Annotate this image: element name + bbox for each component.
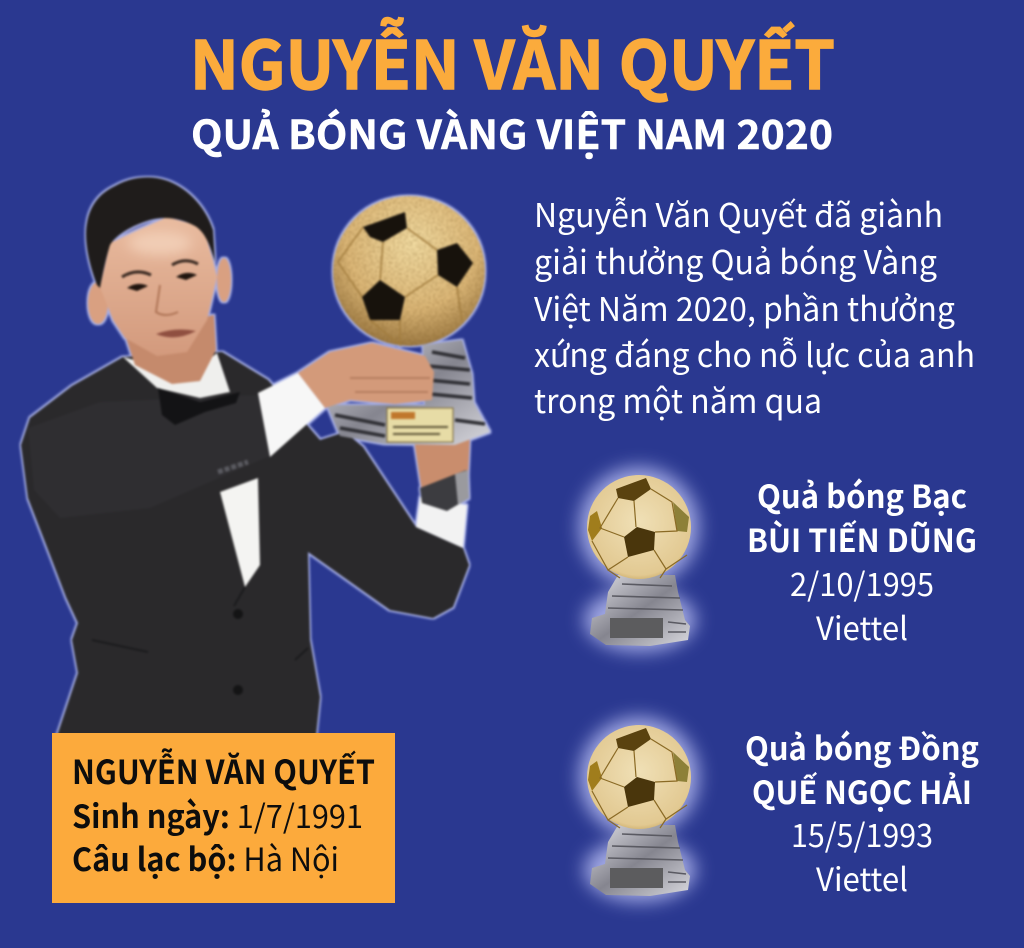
eyes, brows, nose and mouth [122, 261, 198, 337]
shirt front [220, 478, 260, 587]
subtitle: QUẢ BÓNG VÀNG VIỆT NAM 2020 [191, 103, 833, 161]
body text: Việt Năm 2020, phần thưởng [534, 283, 955, 331]
icon: silver ball trophy [579, 467, 699, 652]
bronze ball winner: 15/5/1993 [791, 811, 933, 857]
silver ball winner [747, 472, 977, 650]
bronze ball winner: QUẾ NGỌC HẢI [752, 768, 972, 814]
raised cuff [258, 373, 325, 457]
silver ball winner: Quả bóng Bạc [757, 472, 967, 518]
bronze ball winner: Quả bóng Đồng [745, 724, 979, 770]
body text: Nguyễn Văn Quyết đã giành [534, 189, 943, 237]
silver ball winner: 2/10/1995 [790, 560, 934, 606]
lapel line [92, 587, 308, 660]
body text: giải thưởng Quả bóng Vàng [534, 236, 937, 284]
jacket buttons [233, 609, 243, 619]
silver ball winner: BÙI TIẾN DŨNG [747, 516, 977, 562]
watch [420, 470, 469, 511]
hand holding trophy [298, 343, 434, 408]
shirt collar [123, 353, 230, 398]
silver ball winner: Viettel [816, 604, 908, 650]
player name: NGUYỄN VĂN QUYẾT [72, 746, 375, 794]
panel: player info box [52, 733, 395, 903]
date of birth: Sinh ngày: 1/7/1991 [72, 792, 363, 838]
body text [534, 189, 975, 423]
jacket [21, 352, 469, 736]
bronze ball winner: Viettel [816, 855, 908, 901]
forehead highlight [128, 231, 192, 255]
face [100, 217, 217, 356]
sleeve buttons [218, 462, 248, 472]
title: NGUYỄN VĂN QUYẾT [190, 13, 835, 109]
golden ball [333, 196, 485, 346]
hair [86, 177, 215, 288]
neck [125, 315, 216, 384]
trophy plaque [387, 408, 453, 442]
bow tie [158, 388, 240, 425]
trophy base [327, 340, 490, 445]
body text: trong một năm qua [534, 375, 822, 423]
lower hand [414, 435, 470, 492]
ears [88, 282, 108, 324]
raised sleeve highlight [28, 395, 272, 518]
lower cuff [416, 497, 467, 548]
photo: player holding the golden ball trophy [21, 177, 490, 736]
bronze ball winner [745, 724, 979, 901]
body text: xứng đáng cho nỗ lực của anh [534, 329, 975, 377]
icon: bronze ball trophy [579, 717, 699, 902]
club: Câu lạc bộ: Hà Nội [72, 835, 339, 881]
